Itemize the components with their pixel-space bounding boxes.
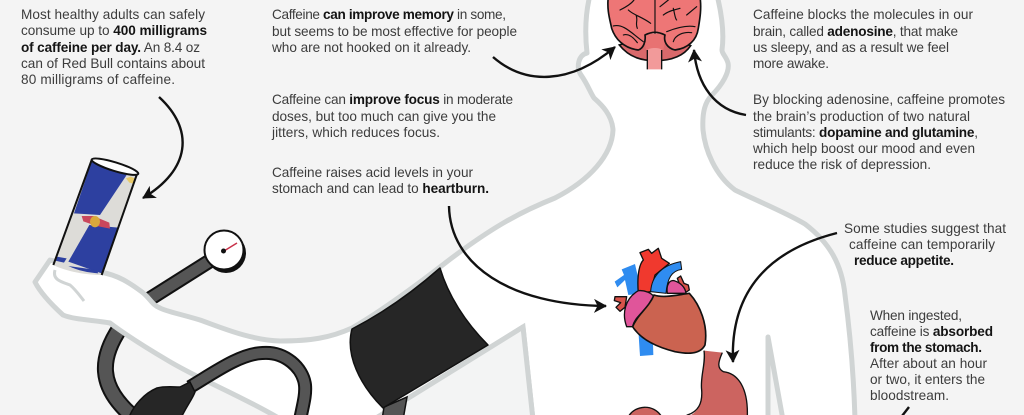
- text: focus: Caffeine can improve focus in moderate: [272, 92, 513, 107]
- text: dopamine and glutamine: By blocking adenosine, caffeine promotes: [753, 92, 1005, 107]
- text: heartburn: Caffeine raises acid levels in your: [272, 165, 473, 180]
- text: adenosine: more awake.: [753, 56, 829, 71]
- arrow: heartburn to heart: [449, 206, 606, 306]
- icon: stomach: [628, 351, 747, 415]
- text: dopamine and glutamine: which help boost our mood and even: [752, 141, 975, 156]
- text: stomach absorption: After about an hour: [870, 356, 987, 371]
- icon: heart: [614, 248, 706, 356]
- text: caffeine limit: [21, 7, 207, 87]
- icon: brain: [608, 0, 701, 69]
- inner arm gap: [373, 327, 533, 415]
- text: focus: jitters, which reduces focus.: [271, 125, 440, 140]
- tube: gauge to cuff behind arm: [105, 257, 216, 414]
- text: stomach absorption: caffeine is absorbed: [870, 324, 993, 339]
- arrow: appetite to stomach: [733, 233, 837, 362]
- tube: cuff and bulb: [190, 353, 407, 415]
- text: caffeine limit: 80 milligrams of caffeine.: [21, 72, 175, 87]
- text: heartburn: stomach and can lead to heartburn.: [272, 181, 489, 196]
- icon: blood pressure cuff: [350, 268, 488, 408]
- text: caffeine limit: consume up to 400 milligrams: [21, 23, 207, 38]
- text: focus: [271, 92, 513, 140]
- text: memory: but seems to be most effective for people: [272, 24, 517, 39]
- arrow: can: [143, 97, 183, 198]
- icon: Red Bull can: [53, 155, 140, 275]
- text: appetite: [844, 221, 1006, 268]
- text: stomach absorption: [870, 308, 993, 403]
- text: adenosine: Caffeine blocks the molecules in our: [753, 7, 973, 22]
- text: adenosine: [753, 7, 973, 71]
- text: caffeine limit: of caffeine per day. An 8.4 oz: [21, 40, 200, 55]
- text: stomach absorption: from the stomach.: [870, 340, 982, 355]
- hand: [54, 270, 84, 301]
- text: stomach absorption: bloodstream.: [870, 388, 949, 403]
- arrow: bloodstream: [902, 407, 909, 415]
- text: dopamine and glutamine: [752, 92, 1005, 172]
- icon: pressure gauge: [204, 230, 246, 273]
- text: adenosine: brain, called adenosine, that make: [753, 24, 958, 39]
- text: stomach absorption: or two, it enters the: [870, 372, 985, 387]
- text: focus: doses, but too much can give you the: [272, 109, 496, 124]
- text: appetite: caffeine can temporarily: [849, 237, 995, 252]
- text: caffeine limit: Most healthy adults can safely: [21, 7, 205, 22]
- text: memory: Caffeine can improve memory in some,: [272, 7, 506, 22]
- text: appetite: reduce appetite.: [854, 253, 954, 268]
- text: memory: [271, 7, 517, 55]
- text: appetite: Some studies suggest that: [844, 221, 1006, 236]
- text: memory: who are not hooked on it already.: [271, 40, 471, 55]
- text: adenosine: us sleepy, and as a result we feel: [753, 40, 949, 55]
- text: dopamine and glutamine: reduce the risk of depression.: [753, 157, 931, 172]
- text: caffeine limit: can of Red Bull contains about: [21, 56, 205, 71]
- arrow: memory to brain: [493, 47, 615, 77]
- text: dopamine and glutamine: the brain’s production of two natural: [753, 109, 970, 124]
- icon: pressure bulb: [128, 382, 195, 415]
- arrow: adenosine to brain: [694, 50, 746, 115]
- text: stomach absorption: When ingested,: [870, 308, 962, 323]
- text: dopamine and glutamine: stimulants: dopamine and glutamine,: [753, 125, 978, 140]
- text: heartburn: [272, 165, 489, 196]
